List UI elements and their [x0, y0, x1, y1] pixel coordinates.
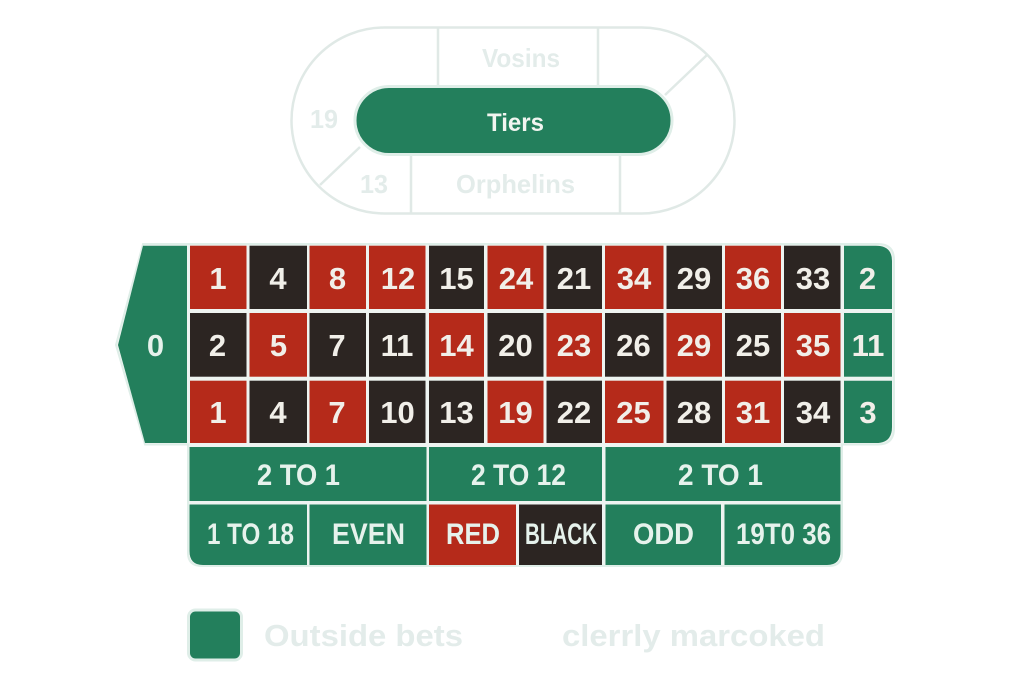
number row 3: 3: [859, 395, 877, 430]
number row 2: 7: [328, 328, 346, 363]
number row 1: 34: [617, 261, 652, 296]
number row 2: 11: [381, 328, 413, 363]
number row 3: 22: [557, 395, 591, 430]
number row 3: 19: [498, 395, 533, 430]
Tiers pill: Tiers: [487, 109, 544, 137]
number row 2: 11: [852, 328, 884, 363]
number row 2: 20: [498, 328, 533, 363]
zero cell: [118, 246, 187, 443]
number row 1: [190, 246, 892, 309]
legend label: Outside bets: Outside bets: [264, 618, 463, 653]
number row 1: 33: [796, 261, 830, 296]
number row 3: 1: [209, 395, 227, 430]
even-money bets row: 1 TO 18: [207, 518, 294, 551]
even-money bets row: [190, 504, 840, 565]
legend label: clerrly marcoked: clerrly marcoked: [562, 618, 825, 653]
number row 1: 2: [859, 261, 876, 296]
number row 3: 4: [269, 395, 287, 430]
number row 1: 4: [269, 261, 287, 296]
number row 2: 35: [796, 328, 830, 363]
dozens row: 2 TO 1: [257, 459, 340, 492]
legend: [188, 610, 825, 660]
label: 13: 13: [360, 169, 388, 199]
number row 3: 7: [328, 395, 346, 430]
number row 1: 15: [439, 261, 474, 296]
label: Vosins: Vosins: [482, 43, 560, 73]
dozens row: 2 TO 12: [471, 459, 566, 492]
even-money bets row: RED: [446, 518, 500, 551]
number row 1: 8: [329, 261, 346, 296]
number row 3: 31: [736, 395, 770, 430]
number row 2: 5: [270, 328, 287, 363]
even-money bets row: 19T0 36: [736, 518, 831, 551]
panel: racetrack diagram: [292, 28, 734, 214]
number row 3: 10: [380, 395, 415, 430]
number row 1: 12: [381, 261, 415, 296]
zero cell: 0: [147, 328, 164, 363]
dozens row: [190, 447, 840, 501]
number row 1: 29: [677, 261, 711, 296]
number row 1: 36: [736, 261, 770, 296]
number row 1: 21: [557, 261, 591, 296]
number row 2: 26: [616, 328, 651, 363]
even-money bets row: BLACK: [525, 518, 597, 551]
number row 2: [190, 313, 892, 377]
table outline: [116, 244, 894, 566]
number row 3: 28: [677, 395, 711, 430]
number row 1: 24: [499, 261, 534, 296]
Tiers pill: [355, 86, 672, 154]
even-money bets row: ODD: [633, 518, 694, 551]
number row 2: 2: [209, 328, 226, 363]
number row 2: 29: [677, 328, 711, 363]
number row 3: 34: [796, 395, 831, 430]
dozens row: 2 TO 1: [678, 459, 763, 492]
number row 2: 23: [557, 328, 591, 363]
legend swatch: [188, 610, 242, 660]
even-money bets row: EVEN: [332, 518, 405, 551]
number row 1: 1: [209, 261, 227, 296]
number row 2: 25: [736, 328, 770, 363]
number row 3: 13: [439, 395, 474, 430]
number row 3: 25: [616, 395, 651, 430]
number row 2: 14: [439, 328, 474, 363]
label: Orphelins: Orphelins: [456, 169, 575, 199]
label: 19: 19: [310, 104, 338, 134]
number row 3: [190, 381, 892, 443]
panel: roulette betting table: [116, 244, 894, 566]
